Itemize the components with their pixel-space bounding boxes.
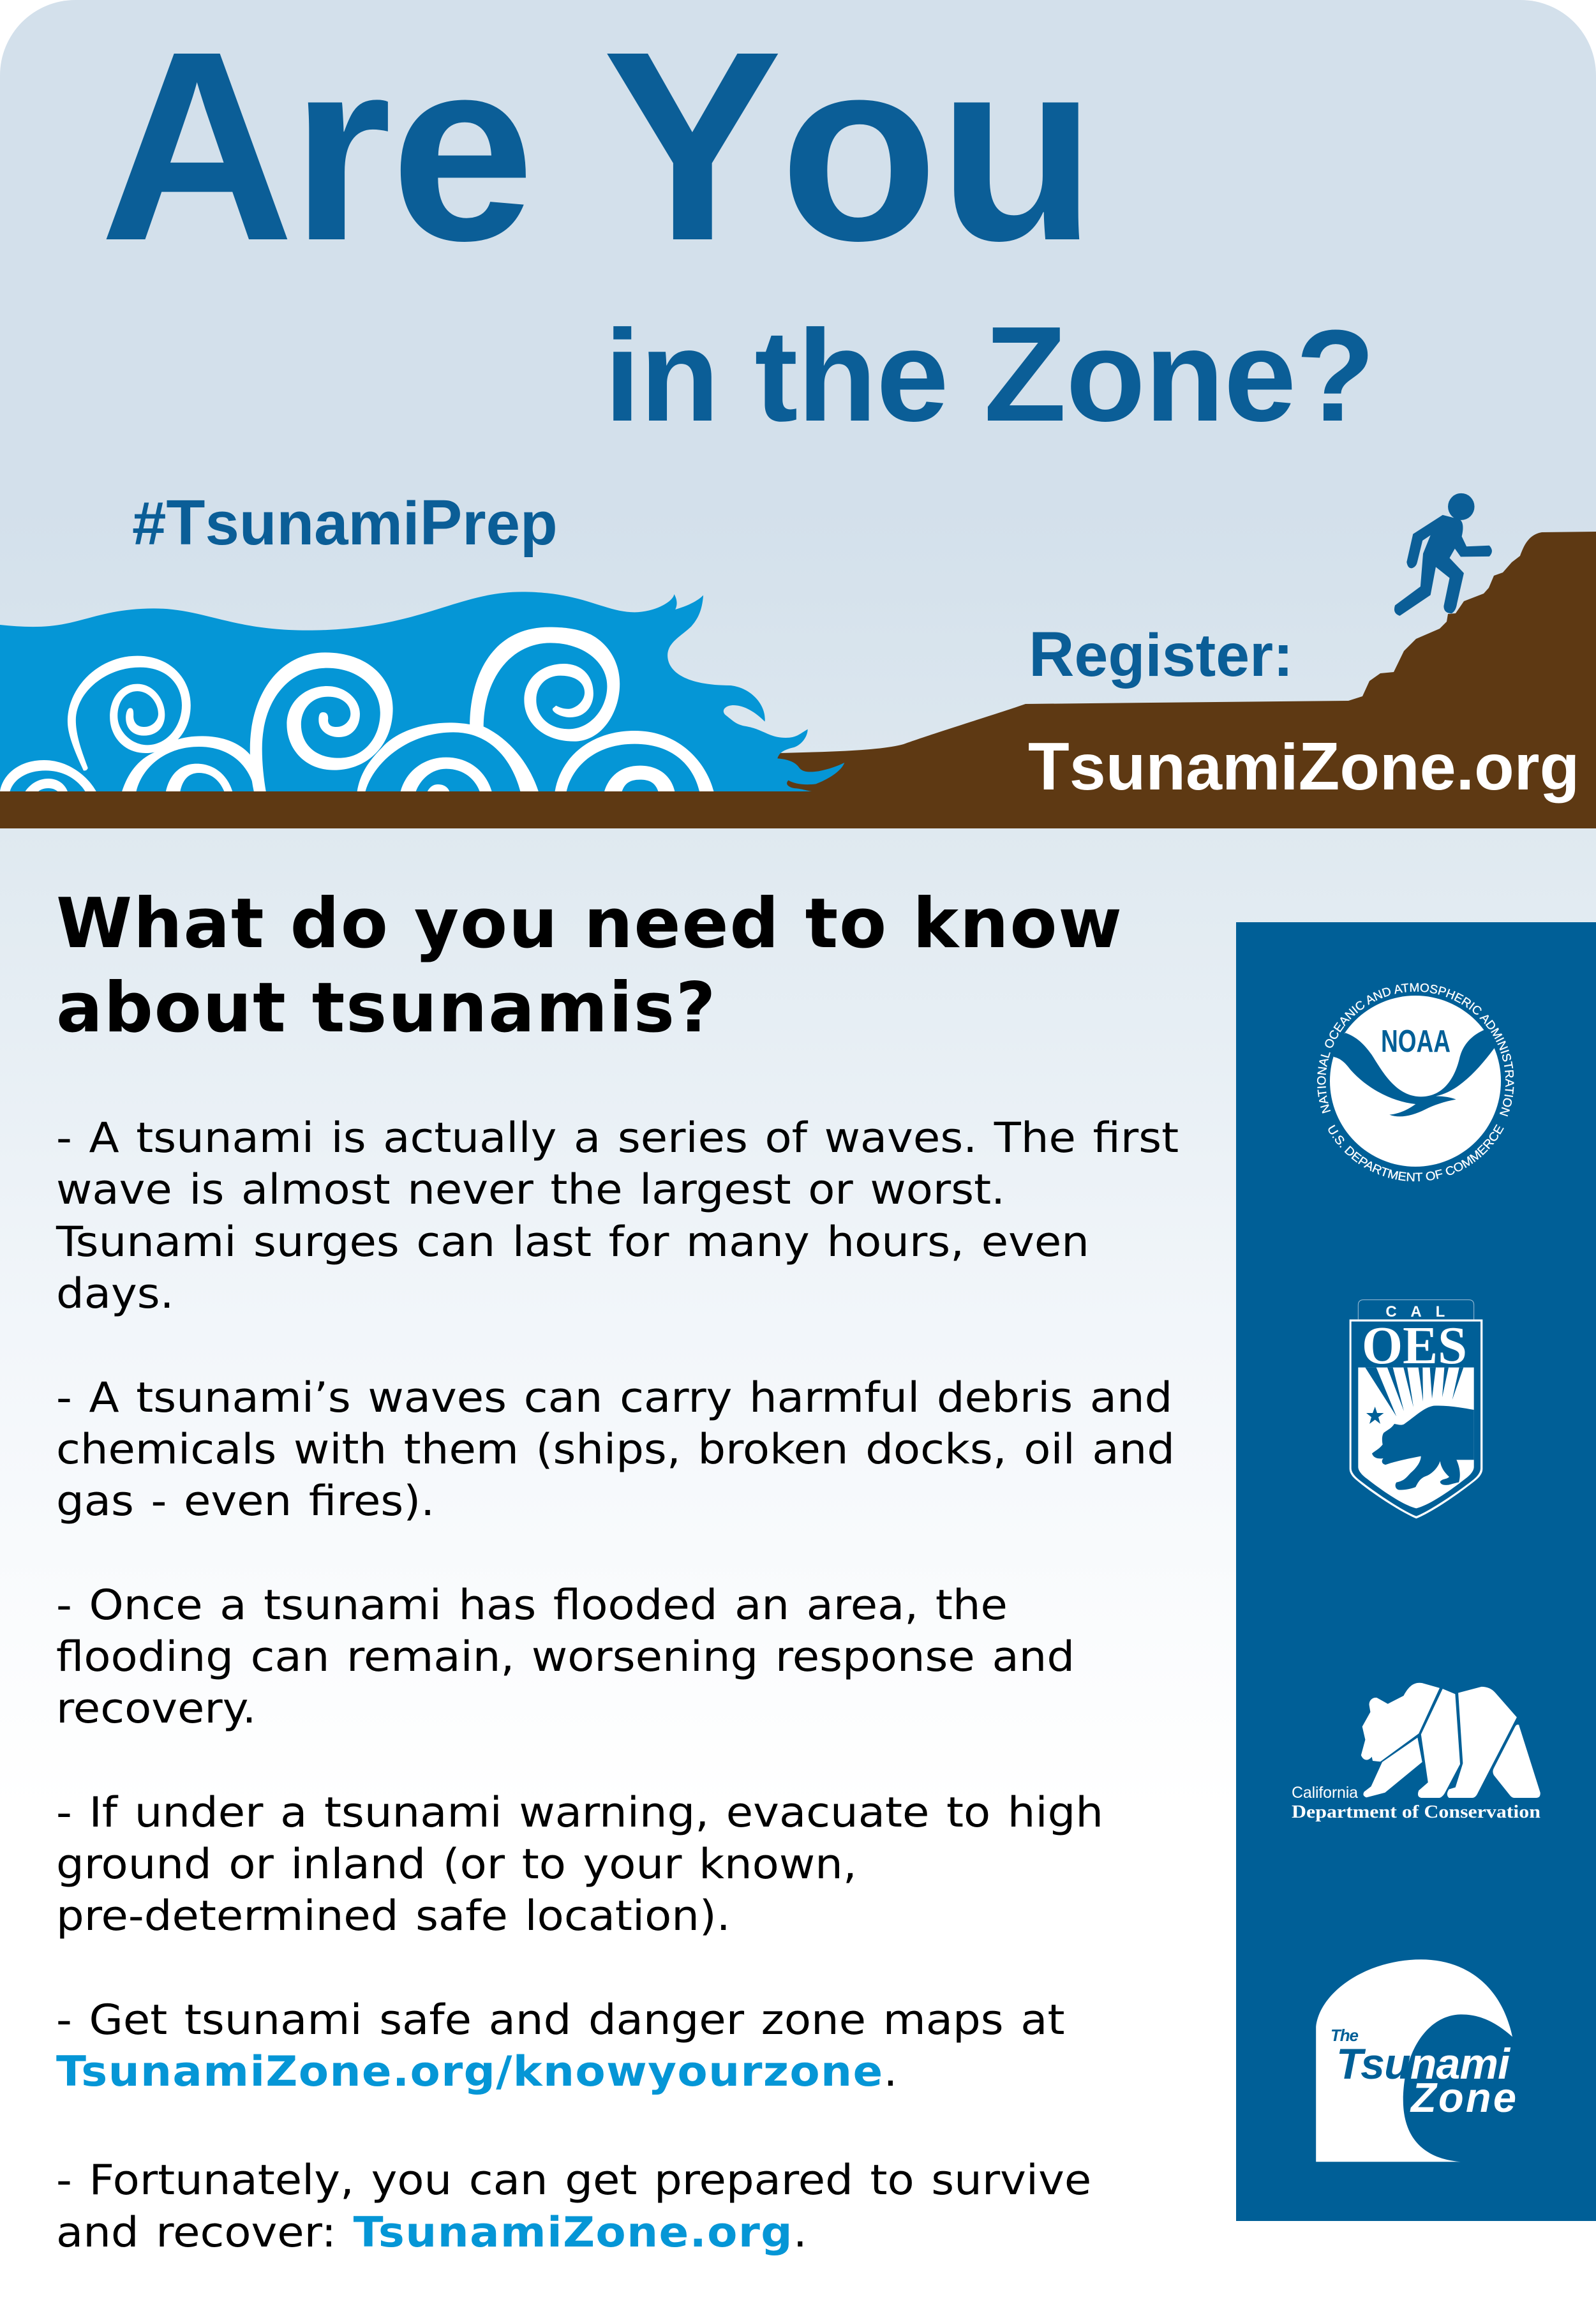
paragraph 6: and recover: TsunamiZone.org. xyxy=(56,2208,807,2257)
white swirls xyxy=(0,627,713,791)
paragraph 4: ground or inland (or to your known, xyxy=(56,1840,857,1888)
logo: NOAA: NOAA xyxy=(1381,1024,1451,1059)
paragraph 3: - Once a tsunami has flooded an area, the xyxy=(56,1581,1008,1629)
hashtag: #TsunamiPrep xyxy=(132,487,558,558)
logo panel xyxy=(1236,922,1596,2221)
website in land: TsunamiZone.org xyxy=(1028,729,1579,804)
logo: NOAA: U.S. DEPARTMENT OF COMMERCE xyxy=(1329,1125,1504,1182)
land xyxy=(0,532,1596,828)
logo: California Department of Conservation: Department of Conservation xyxy=(1292,1802,1540,1822)
paragraph 4: pre-determined safe location). xyxy=(56,1892,731,1940)
paragraph 2 xyxy=(56,1373,1175,1525)
paragraph 2: - A tsunami’s waves can carry harmful debris and xyxy=(56,1373,1172,1422)
logo: Cal OES: CAL xyxy=(1385,1303,1445,1320)
paragraph 2: gas - even fires). xyxy=(56,1477,435,1525)
logo: California Department of Conservation: California xyxy=(1292,1784,1358,1802)
wave body xyxy=(0,592,844,791)
paragraph 1 xyxy=(56,1114,1179,1318)
heading xyxy=(56,884,1122,1048)
paragraph 2: chemicals with them (ships, broken docks, oil and xyxy=(56,1425,1175,1474)
logo: The Tsunami Zone: Tsunami xyxy=(1336,2040,1511,2088)
heading: about tsunamis? xyxy=(56,968,717,1048)
logo: NOAA: NATIONAL OCEANIC AND ATMOSPHERIC ADMINISTRATION xyxy=(1317,983,1514,1117)
paragraph 1: wave is almost never the largest or worst. xyxy=(56,1165,1005,1214)
paragraph 5: - Get tsunami safe and danger zone maps at xyxy=(56,1996,1065,2044)
icon: running person xyxy=(1394,493,1492,616)
title: Are You: u xyxy=(938,5,1096,295)
paragraph 3 xyxy=(56,1581,1075,1733)
title: Are You: A xyxy=(100,0,294,297)
paragraph 6: - Fortunately, you can get prepared to survive xyxy=(56,2156,1091,2204)
paragraph 3: flooding can remain, worsening response and xyxy=(56,1633,1075,1681)
paragraph 5: TsunamiZone.org/knowyourzone. xyxy=(56,2047,897,2096)
register label: Register: xyxy=(1029,618,1294,689)
title: Are You: e xyxy=(391,5,535,295)
logo: NOAA xyxy=(1317,983,1514,1182)
paragraph 6 xyxy=(56,2156,1091,2257)
logo: The Tsunami Zone: Zone xyxy=(1410,2074,1516,2121)
paragraph 1: Tsunami surges can last for many hours, even xyxy=(56,1218,1089,1266)
title: Are You: r xyxy=(291,5,392,295)
logo: The Tsunami Zone: The xyxy=(1331,2026,1359,2045)
title: Are You: o xyxy=(780,5,938,295)
paragraph 1: - A tsunami is actually a series of waves. The first xyxy=(56,1114,1179,1162)
heading: What do you need to know xyxy=(56,884,1122,964)
title: Are You: Y xyxy=(602,0,782,297)
scene: land, wave and runner xyxy=(0,493,1596,828)
paragraph 3: recovery. xyxy=(56,1684,257,1733)
paragraph 4: - If under a tsunami warning, evacuate to high xyxy=(56,1788,1103,1837)
subtitle: in the Zone?: in the Zone? xyxy=(604,298,1375,449)
paragraph 4 xyxy=(56,1788,1103,1940)
logo: Cal OES: OES xyxy=(1362,1316,1467,1375)
paragraph 5 xyxy=(56,1996,1065,2096)
wave xyxy=(0,592,844,791)
paragraph 1: days. xyxy=(56,1269,174,1318)
logo: Cal OES xyxy=(1350,1300,1482,1518)
logo: The Tsunami Zone xyxy=(1316,1959,1516,2162)
body text xyxy=(56,1114,1179,2257)
logo: California Department of Conservation xyxy=(1292,1683,1540,1822)
